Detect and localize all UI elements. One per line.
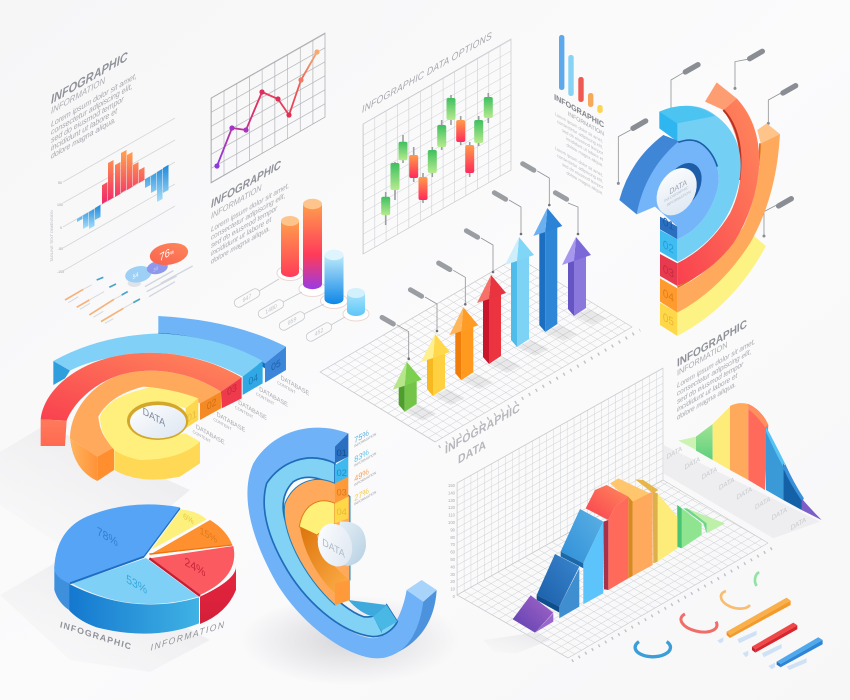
red band 03: [677, 82, 759, 286]
text block: top left: incididunt ut labore et: [51, 106, 118, 153]
axis labels: 0: [60, 226, 62, 230]
wall axis labels: 40: [450, 564, 456, 569]
percentage labels: INFORMATION: [354, 490, 377, 507]
bubbles and legend lines: 54: [133, 272, 139, 281]
text block: top centre: Lorem ipsum dolor sit amet,: [555, 145, 603, 178]
text block: middle left: Lorem ipsum dolor sit amet,: [211, 180, 289, 234]
text block: middle left: INFOGRAPHIC: [211, 158, 282, 211]
bubbles and legend lines: [65, 240, 193, 323]
bar: red: [752, 623, 797, 653]
wall axis labels: 110: [448, 513, 456, 518]
text block: middle left: consectetur adipiscing elit,: [211, 190, 285, 242]
database labels: CONTENT: [235, 404, 253, 420]
yellow band 05: [677, 235, 766, 336]
text block: top centre: dolore magna aliqua.: [566, 142, 603, 168]
purple segment: [513, 595, 553, 633]
percentage labels: [354, 427, 377, 507]
pie labels: 24%: [185, 554, 206, 580]
blue bars: [77, 205, 100, 229]
arrow: orange: [435, 260, 493, 389]
data labels: DATA: [702, 466, 717, 482]
wall axis labels: 30: [450, 572, 456, 577]
cylinder chart: 959: [288, 316, 297, 327]
band 05: [158, 316, 286, 383]
shadow: left donut: [0, 425, 190, 545]
text block: top centre: INFORMATION: [568, 111, 604, 138]
text block: top left: dolore magna aliqua.: [51, 115, 116, 161]
axis labels: -100: [57, 270, 64, 274]
wall axis labels: 120: [448, 505, 456, 510]
arrow: yellow: [407, 286, 465, 405]
pie caption: [60, 619, 225, 653]
wall axis labels: 150: [448, 483, 456, 488]
arrow floor grid: [320, 257, 640, 447]
band 04: [299, 501, 335, 535]
text block: top centre: consectetur adipiscing elit,: [557, 119, 603, 150]
wall axis labels: 60: [450, 550, 456, 555]
left donut chart: [41, 316, 309, 481]
arrow: green: [379, 314, 437, 421]
orange segment: [610, 478, 653, 578]
database labels: CONTENT: [256, 391, 274, 407]
wall axis labels: 50: [450, 557, 456, 562]
candle wicks: [386, 93, 488, 225]
text block: middle left: [211, 158, 289, 266]
text block: right: [677, 318, 755, 422]
axis labels: 100: [57, 203, 63, 207]
axis labels: [49, 181, 64, 274]
yellow segment: [635, 479, 677, 563]
green candles: [381, 97, 493, 215]
arc: red: [681, 614, 717, 632]
column faces 01 to 05: 02: [663, 239, 674, 257]
cylinder chart: 452: [315, 327, 324, 338]
wall axis labels: 70: [450, 542, 456, 547]
column faces 01 to 05: 05: [663, 311, 674, 329]
slice 53: [72, 558, 198, 604]
column faces 01 to 05: [660, 216, 677, 336]
short cylinder: [347, 288, 365, 316]
wall axis labels: 140: [448, 490, 456, 495]
right donut chart: [617, 48, 799, 336]
percentage labels: 49%: [354, 465, 369, 484]
orange cylinder: [281, 216, 299, 277]
percentage labels: 75%: [354, 427, 369, 445]
pie labels: 6%: [183, 510, 194, 527]
red bars: [102, 150, 144, 204]
shadow: pie chart: [0, 560, 210, 672]
wall and floor grid: [448, 368, 776, 661]
column faces: 02: [336, 468, 347, 478]
text block: top centre: consectetur adipiscing elit,: [557, 153, 603, 184]
database labels: DATABASE: [217, 411, 245, 434]
text block: right: Lorem ipsum dolor sit amet,: [677, 336, 755, 390]
data labels: DATA: [791, 516, 806, 532]
tall gradient cylinder: [303, 199, 322, 289]
candlestick panel: [362, 30, 511, 254]
wall axis labels: 90: [450, 527, 456, 532]
text block: middle left: dolore magna aliqua.: [211, 223, 270, 266]
text block: middle left: sed do eiusmod tempor: [211, 203, 278, 250]
text block: right: INFORMATION: [677, 339, 728, 378]
text block: top left: INFOGRAPHIC: [51, 49, 128, 107]
slice 24: [149, 546, 234, 595]
data labels: DATA: [755, 496, 771, 512]
column faces 01 to 05: 04: [663, 287, 674, 305]
data disc: DATA: [669, 177, 687, 197]
pie labels: 53%: [126, 571, 147, 597]
arrow: blue: [519, 160, 577, 341]
band 02: [264, 458, 397, 637]
pie caption: INFORMATION: [151, 619, 225, 653]
light blue band 02: [659, 106, 741, 262]
text block: right: sed do eiusmod tempor: [677, 359, 744, 406]
band 04: [53, 333, 263, 395]
top centre descending bars: [559, 35, 603, 113]
data labels: DATA: [737, 486, 752, 502]
cylinder chart: 947: [243, 293, 252, 304]
column numbers: [187, 357, 281, 425]
band 02: [70, 371, 221, 481]
data labels: DATA: [667, 445, 682, 461]
data labels: DATA: [685, 456, 700, 472]
pie chart: [54, 504, 236, 653]
centre disc: DATA: [143, 406, 165, 430]
pill labels: [233, 279, 345, 343]
pie labels: 78%: [97, 524, 118, 550]
slice 78: [54, 504, 180, 583]
band 03: [41, 353, 242, 446]
column faces: 04: [336, 507, 347, 517]
wall axis labels: 10: [450, 587, 456, 592]
database labels: DATABASE: [238, 399, 267, 422]
percentage labels: 83%: [354, 446, 369, 465]
text block: top left: INFORMATION: [51, 75, 106, 116]
candle panel title: INFOGRAPHIC DATA OPTIONS: [362, 30, 492, 116]
pie seams: [70, 508, 232, 596]
dark blue segment: [537, 554, 579, 618]
column numbers: 01: [187, 408, 197, 425]
arc: orange: [721, 591, 750, 609]
arc: green: [755, 572, 759, 586]
column faces: 01: [336, 448, 347, 458]
arrow: light blue: [491, 189, 549, 356]
database labels: [193, 374, 309, 447]
heading: infographic data: INFOGRAPHIC: [445, 400, 520, 457]
bubbles and legend lines: 76%: [159, 244, 174, 265]
bar: orange: [727, 598, 791, 638]
text block: right: consectetur adipiscing elit,: [677, 346, 751, 398]
column numbers: 05: [271, 357, 281, 374]
base rings: [277, 266, 369, 321]
band 03: [284, 479, 350, 605]
inner blue piece: [348, 600, 397, 633]
data disc: INFORMATION: [667, 189, 691, 208]
wall axis labels: 130: [448, 498, 456, 503]
bar: blue: [777, 637, 823, 667]
database labels: CONTENT: [277, 380, 296, 395]
line chart grid: [211, 33, 325, 183]
axis labels: TAGLINE TEXT DIMENSION: [49, 210, 54, 262]
text block: top centre: sed do eiusmod tempor: [562, 128, 603, 156]
callouts: [618, 59, 782, 236]
text block: top centre: [554, 92, 604, 196]
data labels: [667, 445, 806, 532]
line: [217, 52, 317, 166]
text block: right: incididunt ut labore et: [677, 370, 738, 414]
C donut chart: [247, 427, 437, 658]
red candles: [409, 120, 474, 200]
text block: top centre: INFOGRAPHIC: [554, 92, 604, 130]
column faces 01 to 05: 03: [663, 263, 674, 281]
text block: top left: [51, 49, 137, 161]
bubbles and legend lines: 33: [153, 265, 158, 273]
pie caption: INFOGRAPHIC: [60, 619, 132, 652]
blue segment: [561, 509, 603, 604]
text block: top centre: sed do eiusmod tempor: [562, 162, 603, 190]
arrow: red: [463, 227, 521, 373]
axis labels: -50: [58, 247, 63, 251]
wall axis labels: [448, 483, 456, 599]
heading: infographic data: DATA: [458, 437, 486, 467]
data disc: INFOGRAPHIC: [664, 184, 689, 203]
cylinder chart: [233, 199, 369, 343]
wall axis labels: 0: [453, 594, 456, 599]
text block: right: INFOGRAPHIC: [677, 318, 747, 370]
column faces: 03: [336, 487, 347, 497]
column numbers: 02: [207, 396, 217, 413]
column faces 01 to 05: 01: [663, 216, 674, 234]
column numbers: 04: [248, 372, 259, 388]
data cylinder: DATA: [322, 537, 345, 561]
text block: top left: sed do eiusmod tempor: [51, 94, 124, 145]
bar chart: positive and negative bars: [49, 118, 175, 274]
red segment: [586, 485, 628, 590]
percentage labels: INFORMATION: [354, 471, 377, 487]
slice 15: [149, 520, 232, 555]
pie labels: [97, 510, 217, 597]
arrow: purple: [552, 189, 606, 325]
text block: top centre: Lorem ipsum dolor sit amet,: [555, 111, 603, 144]
column numbers: 03: [227, 382, 237, 399]
text block: middle left: incididunt ut labore et: [211, 214, 272, 258]
text block: top centre: dolore magna aliqua.: [566, 170, 603, 196]
text block: top centre: incididunt ut labore et: [566, 136, 604, 162]
column faces: [335, 433, 348, 523]
data cylinder: [312, 519, 366, 571]
2D bell chart with labels: [663, 403, 822, 538]
percentage labels: 27%: [354, 485, 369, 503]
wall axis labels: 80: [450, 535, 456, 540]
slice 6: [152, 509, 207, 549]
arc: blue: [635, 642, 670, 657]
green segments: [677, 505, 725, 548]
database labels: CONTENT: [193, 429, 211, 444]
blue cylinder: [324, 250, 344, 304]
data labels: DATA: [772, 506, 787, 522]
data disc: [648, 156, 709, 223]
small arcs and bars: [635, 572, 823, 670]
3D bell chart: [483, 478, 725, 653]
text block: top left: consectetur adipiscing elit,: [51, 81, 132, 137]
database labels: DATABASE: [259, 386, 288, 409]
wall axis labels: 100: [448, 520, 456, 525]
database labels: DATABASE: [196, 423, 224, 447]
bell segments: [678, 403, 822, 520]
database labels: DATABASE: [281, 374, 309, 398]
band 01: [100, 387, 200, 480]
shadow: C donut: [240, 595, 460, 685]
pie sides: [54, 567, 70, 611]
text block: middle left: INFORMATION: [211, 181, 262, 221]
pie labels: 15%: [200, 525, 217, 546]
pale blue dashes: [717, 631, 807, 670]
cylinder chart: 1480: [265, 303, 277, 316]
percentage labels: INFORMATION: [354, 451, 377, 468]
blue band 01: [619, 135, 719, 239]
data labels: DATA: [719, 476, 735, 492]
outer blue band: [247, 428, 437, 658]
database labels: CONTENT: [213, 416, 232, 432]
percentage labels: INFORMATION: [354, 432, 377, 449]
text block: top left: Lorem ipsum dolor sit amet,: [51, 71, 137, 129]
centre disc: [127, 401, 188, 440]
axis labels: 50: [58, 181, 62, 185]
orange band 04: [677, 123, 780, 313]
wall axis labels: 20: [450, 579, 456, 584]
text block: right: dolore magna aliqua.: [677, 379, 736, 422]
